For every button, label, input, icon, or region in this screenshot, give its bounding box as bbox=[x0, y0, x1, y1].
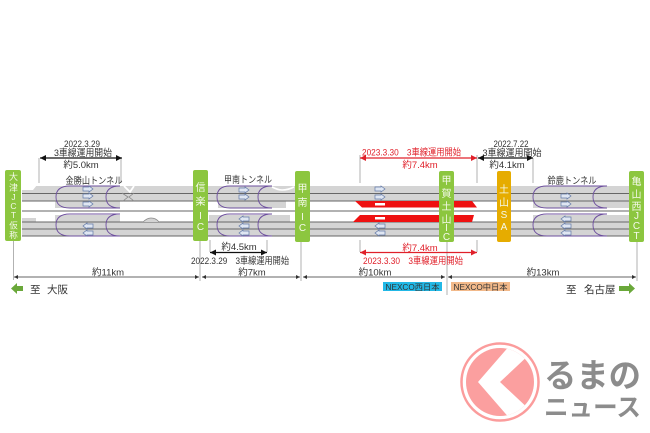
callout: 2023.3.30 red upper: 2023.3.30 3車線運用開始 bbox=[362, 146, 461, 158]
callout: 2023.3.30 red upper: 約7.4km bbox=[402, 159, 438, 171]
interchange: Kameyama-nishi JCT: T bbox=[633, 231, 640, 242]
leader lines bbox=[14, 155, 637, 295]
interchange: Shigaraki IC: C bbox=[197, 222, 204, 233]
interchange: Otsu JCT: 仮 bbox=[9, 220, 18, 230]
interchange: Otsu JCT: J bbox=[11, 192, 16, 202]
interchange: Kameyama-nishi JCT bbox=[629, 171, 644, 242]
interchange: Koka-Tsuchiyama IC: 山 bbox=[442, 214, 452, 226]
direction: Nagoya: 名古屋 bbox=[584, 283, 616, 296]
callout: 2022.7.22: 約4.1km bbox=[489, 159, 525, 171]
service area: Tsuchiyama SA: 土 bbox=[499, 183, 509, 196]
interchange: Otsu JCT: C bbox=[10, 201, 17, 211]
callout: 2022.7.22: 3車線運用開始 bbox=[482, 147, 542, 159]
service area: Tsuchiyama SA: S bbox=[501, 210, 508, 221]
interchange: Shigaraki IC bbox=[193, 170, 208, 241]
distance scale: 約7km bbox=[238, 266, 266, 278]
interchange: Kameyama-nishi JCT: 西 bbox=[632, 202, 642, 213]
tunnel names bbox=[66, 174, 597, 187]
interchange: Otsu JCT: 津 bbox=[9, 183, 18, 193]
direction: Osaka: 大阪 bbox=[47, 283, 68, 296]
callout: 2023.3.30 red upper bbox=[360, 146, 477, 171]
interchange: Konan IC bbox=[295, 171, 310, 242]
callout: 2022.3.29 Kinshoyama: 約5.0km bbox=[63, 159, 99, 171]
distance scale: 約10km bbox=[359, 266, 391, 278]
callout: 2022.3.29 Kinshoyama: 2022.3.29 bbox=[64, 139, 100, 150]
interchange: Otsu JCT: 大 bbox=[9, 171, 18, 182]
direction: Nagoya: 至 bbox=[566, 284, 576, 296]
interchange: Koka-Tsuchiyama IC bbox=[439, 171, 454, 243]
interchange: Otsu JCT: T bbox=[11, 210, 16, 220]
road network bbox=[21, 185, 634, 236]
interchange: Otsu JCT: 称 bbox=[9, 230, 18, 240]
callout: 2022.7.22 bbox=[478, 139, 542, 171]
service area: Tsuchiyama SA: A bbox=[501, 222, 508, 233]
callout: 2023.3.30 red lower: 2023.3.30 3車線運用開始 bbox=[363, 255, 463, 267]
callout: 2022.3.29 Konan: 約4.5km bbox=[221, 241, 257, 253]
direction: Nagoya bbox=[566, 283, 635, 296]
NEXCO West label: NEXCO西日本 bbox=[386, 282, 440, 292]
red new lane sections bbox=[353, 201, 477, 222]
interchange: Shigaraki IC: 楽 bbox=[196, 195, 206, 208]
logo text bbox=[544, 357, 641, 422]
logo: Kuruma no News bbox=[462, 344, 641, 422]
logo mark bbox=[462, 344, 538, 420]
service area: Tsuchiyama SA: 山 bbox=[499, 197, 509, 209]
interchange: Koka-Tsuchiyama IC: 賀 bbox=[442, 188, 452, 200]
interchange: Koka-Tsuchiyama IC: 土 bbox=[442, 200, 452, 213]
interchange: Konan IC: C bbox=[299, 223, 306, 234]
tunnels bbox=[56, 186, 607, 236]
interchange: Kameyama-nishi JCT: J bbox=[634, 211, 639, 222]
callout: 2022.3.29 Kinshoyama: 3車線運用開始 bbox=[54, 147, 112, 159]
callout: 2023.3.30 red lower: 約7.4km bbox=[402, 242, 438, 254]
callout: 2022.7.22: 2022.7.22 bbox=[494, 139, 528, 150]
tunnel names: 甲南トンネル bbox=[224, 174, 272, 186]
callout: 2022.3.29 Kinshoyama bbox=[40, 139, 122, 171]
interchange: Koka-Tsuchiyama IC: 甲 bbox=[442, 176, 452, 187]
distance scale: 約13km bbox=[527, 266, 559, 278]
tunnel names: 金勝山トンネル bbox=[66, 175, 123, 187]
interchange: Koka-Tsuchiyama IC: C bbox=[443, 232, 450, 243]
distance scale: 約11km bbox=[92, 266, 124, 278]
callout: 2022.3.29 Konan: 2022.3.29 3車線運用開始 bbox=[191, 255, 289, 267]
NEXCO Central label: NEXCO中日本 bbox=[454, 282, 508, 292]
interchange: Shigaraki IC: I bbox=[199, 211, 202, 222]
direction: Osaka: 至 bbox=[30, 284, 40, 296]
interchange: Konan IC: 南 bbox=[298, 196, 308, 209]
interchange: Kameyama-nishi JCT: 山 bbox=[632, 189, 642, 201]
logo text: るまの bbox=[544, 357, 641, 394]
interchange: Kameyama-nishi JCT: 亀 bbox=[632, 175, 642, 188]
tunnel names: 鈴鹿トンネル bbox=[548, 175, 597, 187]
lane arrows bbox=[83, 186, 571, 236]
interchange: Shigaraki IC: 信 bbox=[196, 181, 206, 194]
direction: Osaka bbox=[11, 283, 68, 296]
distance scale bbox=[14, 266, 636, 278]
logo text: ニュース bbox=[544, 394, 641, 422]
interchange: Koka-Tsuchiyama IC: I bbox=[445, 223, 448, 234]
service area: Tsuchiyama SA bbox=[497, 171, 511, 242]
interchange: Konan IC: 甲 bbox=[298, 184, 308, 195]
callout: 2023.3.30 red lower bbox=[360, 242, 477, 267]
interchange: Kameyama-nishi JCT: C bbox=[633, 221, 640, 232]
interchange: Otsu JCT bbox=[5, 170, 21, 241]
interchange: Konan IC: I bbox=[301, 212, 304, 223]
callout: 2022.3.29 Konan bbox=[191, 241, 289, 267]
